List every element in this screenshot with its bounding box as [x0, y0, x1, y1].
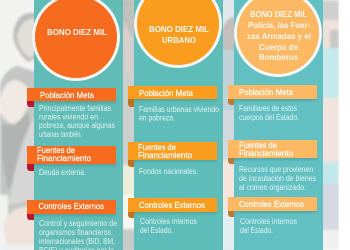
ribbon: Población Meta: [27, 88, 116, 107]
panel: Bono Diez Mil: [27, 0, 123, 250]
ribbon: Fuentes de Financiamiento: Fuentes de: [239, 140, 277, 150]
circle heading: Bono Diez Mil Policía, las Fuerzas Armadas y el Cuerpo de Bomberos: Bomberos: [259, 53, 298, 62]
text: población meta description: [39, 104, 115, 139]
ribbon: Controles Externos: Controles Externos: [139, 200, 205, 210]
ribbon: Población Meta: [128, 86, 217, 107]
ribbon: Fuentes de Financiamiento: Financiamiento: [138, 150, 192, 160]
text: controles description: Control y seguimiento de: [39, 219, 117, 228]
ribbon: Fuentes de Financiamiento: [128, 142, 217, 167]
text: fuentes description: Recursos que provienen: [239, 165, 313, 174]
panel: Bono Diez Mil Urbano: [128, 0, 223, 250]
circle heading: Bono Diez Mil Policía, las Fuerzas Armadas y el Cuerpo de Bomberos: Policía, las Fuer-: [248, 21, 310, 30]
text: población meta description: Principalmente familias: [39, 104, 111, 113]
ribbon: Población Meta: Población Meta: [40, 90, 94, 100]
circle heading: Bono Diez Mil: [34, 0, 118, 80]
background photo: woman at left: [0, 0, 36, 250]
ribbon: Fuentes de Financiamiento: [228, 140, 317, 164]
text: población meta description: [239, 104, 299, 122]
text: controles description: [140, 218, 197, 233]
ribbon: Población Meta: Población Meta: [239, 87, 293, 97]
panel: Bono Diez Mil Policía: [228, 0, 323, 250]
ribbon: Fuentes de Financiamiento: Financiamiento: [37, 153, 91, 163]
text: población meta description: cuerpos del Estado.: [239, 113, 299, 122]
ribbon: Fuentes de Financiamiento: Financiamiento: [239, 148, 293, 158]
circle heading: Bono Diez Mil Policía, las Fuerzas Armadas y el Cuerpo de Bomberos: [236, 0, 320, 76]
circle heading: Bono Diez Mil Policía, las Fuerzas Armadas y el Cuerpo de Bomberos: BONO DIEZ MIL: [250, 10, 307, 19]
circle heading: Bono Diez Mil Urbano: URBANO: [162, 36, 197, 45]
circle heading: Bono Diez Mil: BONO DIEZ MIL: [47, 28, 107, 37]
ribbon: Fuentes de Financiamiento: [27, 145, 116, 171]
ribbon: Controles Externos: [228, 197, 317, 217]
text: controles description: [240, 218, 297, 233]
text: controles description: internacionales (BID, BM,: [39, 237, 115, 246]
ribbon: Controles Externos: Controles Externos: [239, 199, 304, 209]
ribbon: Población Meta: Población Meta: [139, 88, 193, 98]
ribbon: Fuentes de Financiamiento: Fuentes de: [37, 145, 75, 155]
text: población meta description: rurales viviendo en: [39, 112, 98, 122]
text: controles description: [39, 219, 117, 250]
background photo: person at right: [323, 0, 339, 250]
background photo: crowd between second and third columns: [223, 0, 234, 250]
text: controles description: Controles internos: [240, 217, 297, 226]
text: controles description: del Estado.: [140, 226, 173, 235]
text: fuentes description: de incautación de bienes: [239, 174, 316, 183]
circle heading: Bono Diez Mil Policía, las Fuerzas Armadas y el Cuerpo de Bomberos: Cuerpo de: [259, 43, 298, 52]
text: fuentes description: Fondos nacionales.: [139, 167, 198, 176]
ribbon: Controles Externos: Controles Externos: [38, 201, 104, 211]
text: controles description: organismos financieros: [39, 228, 111, 237]
ribbon: Fuentes de Financiamiento: Fuentes de: [138, 142, 176, 152]
text: población meta description: pobreza, aunque algunas: [39, 121, 115, 130]
text: población meta description: [139, 105, 219, 122]
circle heading: Bono Diez Mil Urbano: BONO DIEZ MIL: [149, 25, 209, 34]
text: población meta description: Familiares de estos: [239, 104, 297, 113]
ribbon: Controles Externos: [128, 198, 217, 218]
background photo: crowd between first and second columns: [123, 0, 134, 250]
text: población meta description: urbanas también.: [39, 130, 82, 139]
text: fuentes description: al crimen organizado.: [239, 183, 306, 192]
ribbon: Población Meta: [228, 85, 317, 105]
circle heading: Bono Diez Mil Urbano: [136, 0, 220, 66]
text: fuentes description: Deuda externa.: [39, 168, 86, 177]
text: población meta description: Familias urbanas viviendo: [139, 105, 219, 114]
text: población meta description: en pobreza.: [139, 114, 175, 122]
ribbon: Controles Externos: [27, 200, 116, 220]
text: controles description: Controles internos: [140, 217, 197, 226]
text: fuentes description: [239, 165, 316, 192]
circle heading: Bono Diez Mil Policía, las Fuerzas Armadas y el Cuerpo de Bomberos: zas Armadas y el: [247, 32, 311, 41]
text: controles description: del Estado.: [240, 226, 273, 235]
